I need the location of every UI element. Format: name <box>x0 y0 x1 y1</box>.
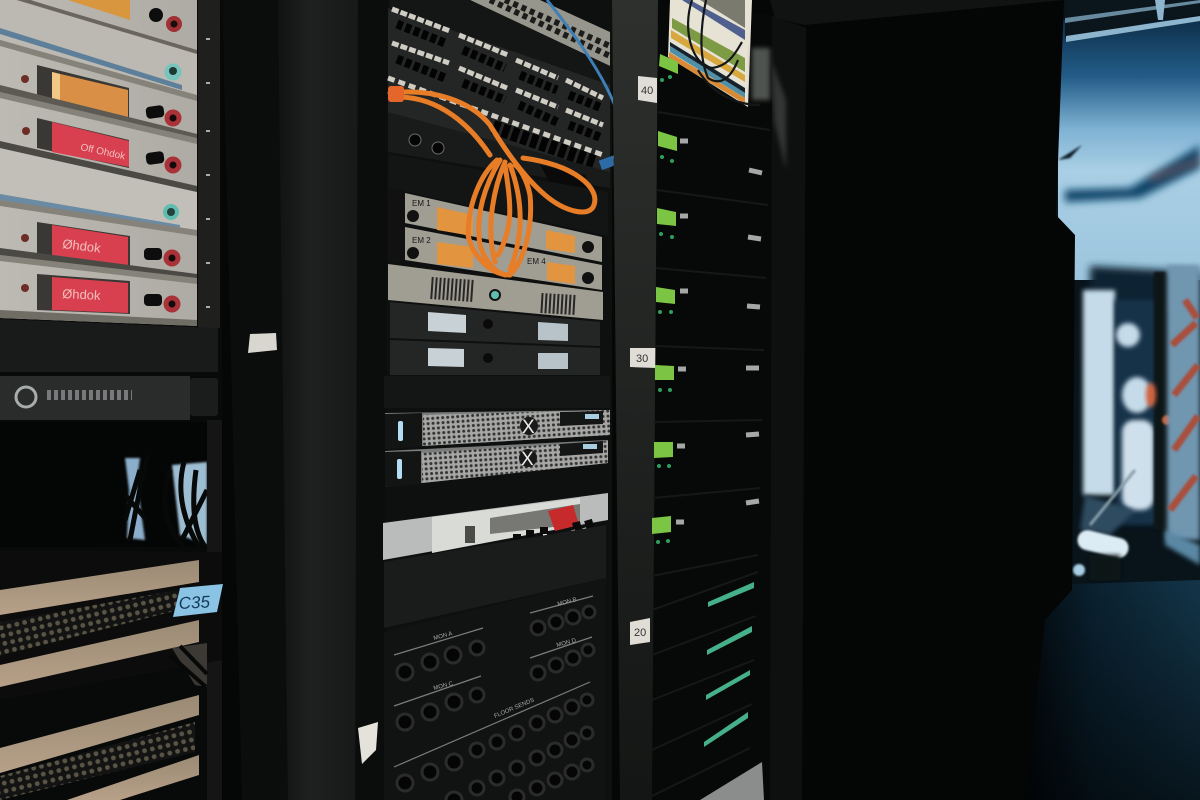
blank 1U panel <box>384 525 606 628</box>
speakon patch bay: MON C <box>433 681 454 692</box>
speakon patch bay: MON B <box>557 597 578 608</box>
device row 6 red: Øhdok <box>62 236 102 256</box>
black rack unit strip <box>384 376 610 408</box>
blank unit under preamp <box>388 154 608 236</box>
blue connector <box>599 156 615 170</box>
background: blurred room at right <box>1020 0 1200 800</box>
speakon patch bay: MON A <box>433 631 453 642</box>
tag: 40: 40 <box>641 85 653 97</box>
label: C35: C35 <box>178 592 211 613</box>
tape scrap <box>358 722 378 764</box>
network switch shelf <box>383 493 608 571</box>
tag: 40 <box>638 76 657 103</box>
tape tag <box>248 333 277 353</box>
speakon patch bay: FLOOR SENDS <box>493 698 535 720</box>
audio interface <box>388 264 603 320</box>
tag: 20: 20 <box>634 627 646 639</box>
shelf <box>0 319 218 372</box>
rack post centre <box>612 0 660 800</box>
panel: right rack <box>652 0 772 800</box>
device row 4 red: Off Ohdok <box>79 142 127 163</box>
orange connector <box>388 86 404 102</box>
dark curtain wall <box>800 0 1075 800</box>
wireless receivers: EM 2 <box>412 236 431 245</box>
status LEDs <box>656 75 674 544</box>
panel: left rack devices <box>0 0 223 800</box>
right rail <box>207 420 222 800</box>
amplifier LED strips <box>704 582 754 747</box>
blue cable <box>547 0 622 165</box>
speakon patch bay: MON D <box>556 638 577 649</box>
rack dividers <box>652 112 770 576</box>
receivers with small displays <box>390 302 600 375</box>
speakon patch bay <box>384 578 606 800</box>
device row 3 orange <box>0 40 197 140</box>
patch panel lower <box>0 695 199 800</box>
network switches <box>388 0 610 180</box>
tag: 30: 30 <box>636 353 648 365</box>
panel: centre rack <box>383 0 622 800</box>
device row 1 <box>0 0 197 53</box>
wireless receivers: EM 4 <box>527 257 546 266</box>
orange cable <box>390 92 595 275</box>
silver unit bottom <box>700 762 764 800</box>
wireless receivers <box>388 188 602 290</box>
label: C35 <box>173 584 223 617</box>
servers: X <box>522 417 535 438</box>
device row 6 red <box>0 200 197 280</box>
servers <box>385 410 610 487</box>
rack post left <box>222 0 388 800</box>
colourful sticker sheet <box>668 0 760 107</box>
silver clips <box>676 141 762 522</box>
device row 2 plain <box>0 0 197 97</box>
tag: 20 <box>630 618 650 645</box>
patch panel upper <box>0 550 222 700</box>
frame: inner highlight <box>772 62 786 170</box>
small cable window <box>170 643 207 687</box>
preamp unit below switches <box>388 112 610 205</box>
rack ears <box>198 0 220 328</box>
device row 7 red <box>0 255 197 326</box>
amplifier unit <box>0 376 218 420</box>
post face <box>278 0 358 800</box>
device row 5 plain <box>0 148 197 232</box>
frame: right rack door edge <box>768 15 806 800</box>
green status lights <box>652 54 678 534</box>
device row 4 red <box>0 92 197 192</box>
inner silver gap <box>752 48 770 100</box>
device row 7 red: Øhdok <box>62 286 101 303</box>
overhead beam <box>770 0 1064 25</box>
tag: 30 <box>630 348 656 368</box>
wireless receivers: EM 1 <box>412 199 431 208</box>
servers: X <box>521 449 534 470</box>
cable bundle window <box>0 422 215 548</box>
